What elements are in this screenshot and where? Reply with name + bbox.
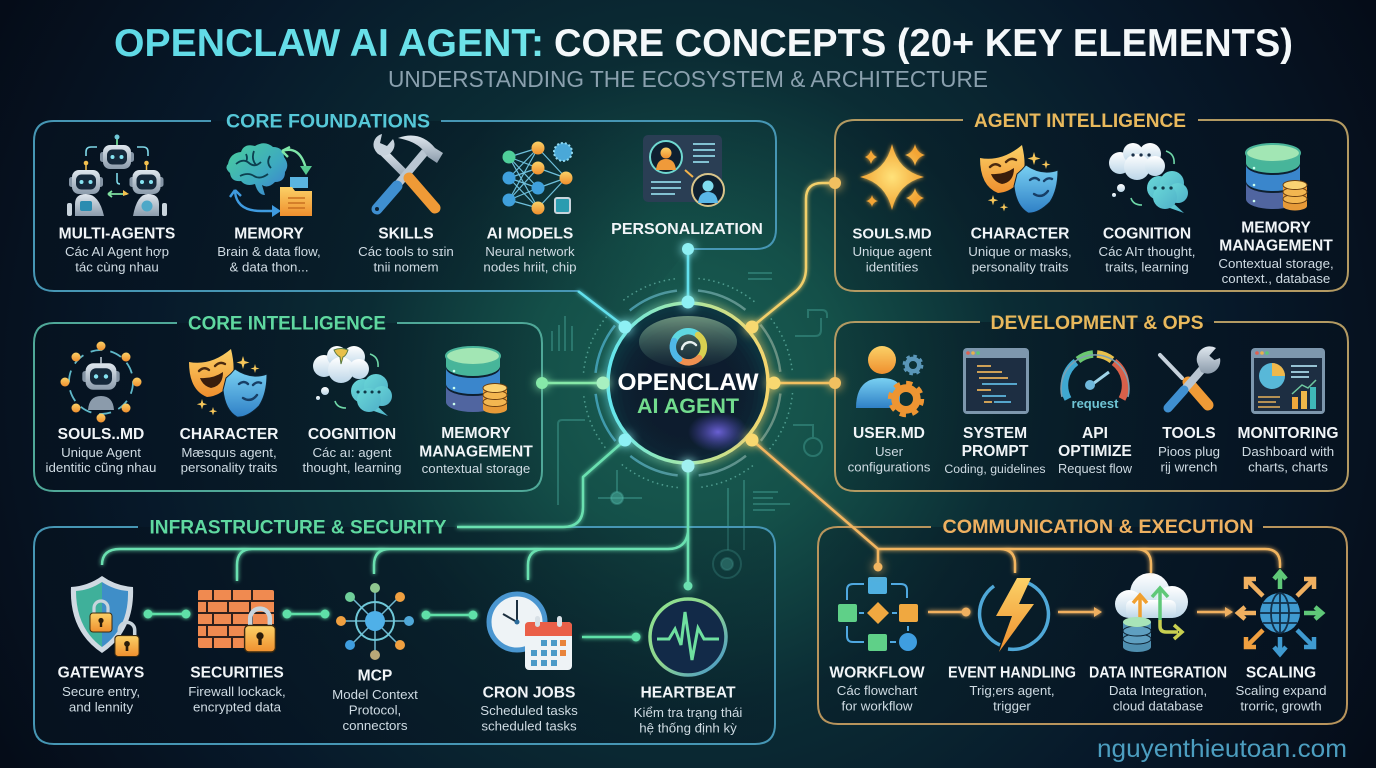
link — [181, 181, 215, 183]
item: character — [968, 145, 1072, 274]
label: WORKFLOW — [829, 664, 925, 682]
label: MCP — [358, 668, 392, 684]
connector: core foundations vertical — [687, 249, 689, 302]
icon: brain and folder — [226, 143, 312, 217]
item: api optimize — [1058, 354, 1133, 476]
heading: DEVELOPMENT & OPS — [990, 313, 1204, 334]
description: trorric, growth — [1240, 698, 1322, 713]
item: personalization — [611, 135, 763, 238]
panel: communication and execution — [818, 517, 1347, 724]
description: charts, charts — [1248, 460, 1328, 474]
label: CHARACTER — [971, 226, 1069, 242]
label: MANAGEMENT — [419, 444, 533, 460]
link — [152, 382, 182, 384]
hub nodes — [536, 177, 882, 590]
icon: swirl logo — [673, 331, 704, 362]
label: EVENT HANDLING — [948, 664, 1076, 682]
item: scaling — [1236, 572, 1326, 713]
label: MANAGEMENT — [1219, 238, 1333, 254]
hub purple glow — [688, 412, 748, 452]
link — [278, 382, 304, 384]
icon: shield with locks — [71, 576, 139, 656]
link — [588, 181, 628, 183]
label: USER.MD — [853, 425, 925, 442]
hub subtitle: AI AGENT — [637, 395, 739, 418]
item: memory management — [419, 347, 533, 476]
icon: globe with arrows — [1238, 572, 1322, 654]
item: character — [180, 349, 278, 475]
icon: sparkles — [860, 144, 925, 210]
item: tools — [1158, 346, 1220, 474]
description: encrypted data — [193, 699, 282, 714]
link — [940, 181, 972, 183]
icon: profile card — [643, 135, 724, 206]
icon: lightning with cycle — [980, 578, 1048, 652]
icon: wrench and hammer — [373, 134, 443, 211]
link — [1200, 181, 1233, 183]
link — [455, 181, 488, 183]
item: cognition — [1098, 143, 1196, 274]
description: Unique agent — [852, 244, 932, 259]
item: workflow — [829, 577, 925, 713]
icon: flowchart — [838, 577, 918, 651]
label: MULTI-AGENTS — [59, 226, 175, 242]
description: hệ thống định kỳ — [639, 720, 737, 736]
description: Scaling expand — [1236, 683, 1326, 698]
gauge label: request — [1072, 396, 1119, 411]
description: Pioos plug — [1158, 444, 1220, 459]
link — [928, 608, 970, 616]
description: Data Integration, — [1109, 683, 1207, 698]
description: Protocol, — [349, 702, 401, 718]
description: Unique or masks, — [968, 244, 1072, 259]
label: OPTIMIZE — [1058, 443, 1132, 460]
description: & data thon... — [229, 259, 309, 274]
description: tác cùng nhau — [75, 259, 159, 274]
label: SECURITIES — [190, 664, 284, 682]
icon: screwdriver and wrench — [1160, 346, 1220, 408]
connector: agent intelligence — [752, 183, 835, 327]
description: cloud database — [1113, 698, 1203, 713]
link — [582, 632, 640, 642]
item: heartbeat — [634, 599, 742, 736]
panel: development and ops — [835, 313, 1348, 491]
description: Contextual storage, — [1218, 256, 1334, 271]
connector: communication bus — [752, 440, 1280, 573]
link — [1197, 607, 1233, 617]
icon: gauge — [1061, 354, 1129, 399]
description: Các flowchart — [837, 683, 917, 698]
panel: core foundations — [34, 112, 776, 327]
item: data integration — [1089, 573, 1227, 713]
background circuit decorations — [552, 273, 827, 578]
label: SYSTEM — [963, 425, 1027, 442]
icon: connector hub — [336, 583, 414, 660]
label: API — [1082, 425, 1108, 442]
description: Unique Agent — [61, 445, 141, 460]
item: securities — [188, 590, 286, 714]
description: Firewall lockack, — [188, 684, 286, 699]
link — [282, 610, 330, 618]
icon: brick firewall with lock — [198, 590, 275, 652]
hub orbit arcs — [583, 278, 793, 488]
description: Secure entry, — [62, 684, 140, 699]
description: Các AIт thought, — [1098, 244, 1196, 259]
description: Scheduled tasks — [480, 703, 578, 718]
description: nodes hriit, chip — [483, 259, 577, 274]
description: Coding, guidelines — [944, 462, 1046, 476]
description: contextual storage — [422, 461, 530, 476]
connector: infrastructure heading line — [457, 440, 625, 527]
panel: infrastructure and security — [34, 518, 775, 744]
link — [1137, 382, 1155, 384]
label: PERSONALIZATION — [611, 221, 763, 238]
description: identitic cũng nhau — [46, 460, 156, 475]
label: SKILLS — [378, 226, 434, 242]
central hub: OpenClaw AI Agent — [536, 177, 882, 590]
link — [1070, 181, 1099, 183]
label: AI MODELS — [487, 226, 573, 242]
label: GATEWAYS — [58, 664, 144, 682]
hub title: OPENCLAW — [618, 369, 759, 396]
heading: AGENT INTELLIGENCE — [974, 111, 1186, 132]
label: COGNITION — [308, 426, 396, 443]
label: MEMORY — [1241, 220, 1311, 236]
label: MEMORY — [234, 226, 304, 242]
description: Các aı: agent — [312, 445, 392, 460]
description: Model Context — [332, 687, 418, 702]
description: trigger — [993, 698, 1031, 713]
label: TOOLS — [1162, 425, 1216, 442]
description: traits, learning — [1105, 259, 1189, 274]
description: for workflow — [842, 698, 913, 713]
icon: theatre masks — [189, 349, 267, 417]
item: event handling — [948, 578, 1076, 713]
icon: user with gears — [856, 346, 921, 414]
item: memory management — [1218, 144, 1334, 286]
link — [325, 181, 359, 183]
heading: COMMUNICATION & EXECUTION — [942, 517, 1254, 538]
link — [1038, 382, 1051, 384]
link — [422, 610, 478, 620]
icon: database — [1246, 144, 1307, 210]
description: configurations — [848, 460, 931, 474]
item: cognition — [302, 346, 402, 475]
icon: robot in orbit — [60, 342, 142, 422]
description: rịj wrench — [1161, 460, 1217, 474]
icon: robots — [67, 134, 167, 216]
link — [933, 382, 952, 384]
item: system prompt — [944, 348, 1046, 476]
description: and lennity — [69, 699, 134, 714]
label: SOULS..MD — [58, 426, 144, 443]
item: skills — [358, 134, 454, 274]
icon: theatre masks — [980, 145, 1058, 213]
title highlight: OpenClaw AI Agent: OPENCLAW AI AGENT: — [114, 22, 544, 65]
item: memory — [217, 143, 321, 274]
description: Các tools to sɪin — [358, 244, 454, 259]
icon: heartbeat monitor — [650, 599, 726, 675]
hub highlight — [639, 316, 737, 368]
description: connectors — [342, 718, 408, 733]
heading: CORE INTELLIGENCE — [188, 314, 386, 334]
description: Request flow — [1058, 461, 1133, 476]
connector: core intelligence — [542, 382, 603, 384]
description: Dashboard with — [1242, 444, 1334, 459]
description: Kiểm tra trạng thái — [634, 705, 742, 720]
description: personality traits — [972, 259, 1069, 274]
icon: thought bubbles — [313, 346, 392, 416]
label: CHARACTER — [180, 426, 278, 443]
item: gateways — [58, 576, 144, 714]
item: cron jobs — [480, 594, 578, 734]
subtitle: UNDERSTANDING THE ECOSYSTEM & ARCHITECTURE — [388, 66, 988, 92]
icon: dashboard — [1251, 348, 1325, 414]
icon: thought bubbles — [1109, 143, 1188, 213]
title — [114, 22, 1293, 65]
icon: neural network — [502, 142, 572, 214]
item: monitoring — [1237, 348, 1339, 474]
title: core concepts: CORE CONCEPTS (20+ KEY ELEMENTS) — [554, 22, 1293, 65]
label: PROMPT — [962, 443, 1029, 460]
label: DATA INTEGRATION — [1089, 664, 1227, 682]
label: MONITORING — [1237, 425, 1339, 442]
label: HEARTBEAT — [640, 684, 736, 702]
item: ai models — [483, 142, 577, 274]
item: souls.md — [852, 144, 932, 274]
heading: INFRASTRUCTURE & SECURITY — [150, 518, 447, 538]
panel: agent intelligence — [835, 111, 1348, 291]
description: personality traits — [181, 460, 278, 475]
description: Trig;ers agent, — [969, 683, 1055, 698]
connector: development and ops — [774, 382, 835, 384]
description: thought, learning — [302, 460, 402, 475]
connector: infrastructure bus — [102, 466, 688, 586]
description: Mæsquıs agent, — [181, 445, 277, 460]
watermark: nguyenthieutoan.com — [1097, 735, 1347, 763]
panel: core intelligence — [34, 314, 542, 491]
link — [403, 382, 432, 384]
label: CRON JOBS — [483, 684, 575, 702]
icon: database — [446, 347, 507, 414]
link — [1224, 382, 1241, 384]
hub sphere — [608, 303, 768, 463]
heading: CORE FOUNDATIONS — [226, 112, 430, 132]
icon: clock and calendar — [489, 594, 572, 670]
description: User — [875, 444, 903, 459]
label: MEMORY — [441, 425, 511, 442]
icon: code window — [963, 348, 1029, 414]
description: identities — [866, 259, 919, 274]
label: SCALING — [1246, 664, 1316, 682]
link — [144, 610, 190, 618]
item: multi-agents — [59, 134, 175, 274]
description: Các AI Agent hợp — [65, 244, 169, 259]
item: souls..md — [46, 342, 156, 475]
label: COGNITION — [1103, 226, 1191, 242]
label: SOULS.MD — [852, 226, 932, 242]
description: scheduled tasks — [481, 718, 577, 734]
description: Neural network — [485, 244, 575, 259]
description: tnii nomem — [373, 259, 439, 274]
connector: core foundations diagonal — [578, 291, 625, 327]
link — [1058, 607, 1102, 617]
connector lines from hub to panels — [102, 183, 1280, 586]
description: Brain & data flow, — [217, 244, 321, 259]
icon: cloud database — [1115, 573, 1188, 652]
item: user.md — [848, 346, 931, 474]
description: context., database — [1222, 271, 1330, 286]
item: mcp — [332, 583, 418, 733]
